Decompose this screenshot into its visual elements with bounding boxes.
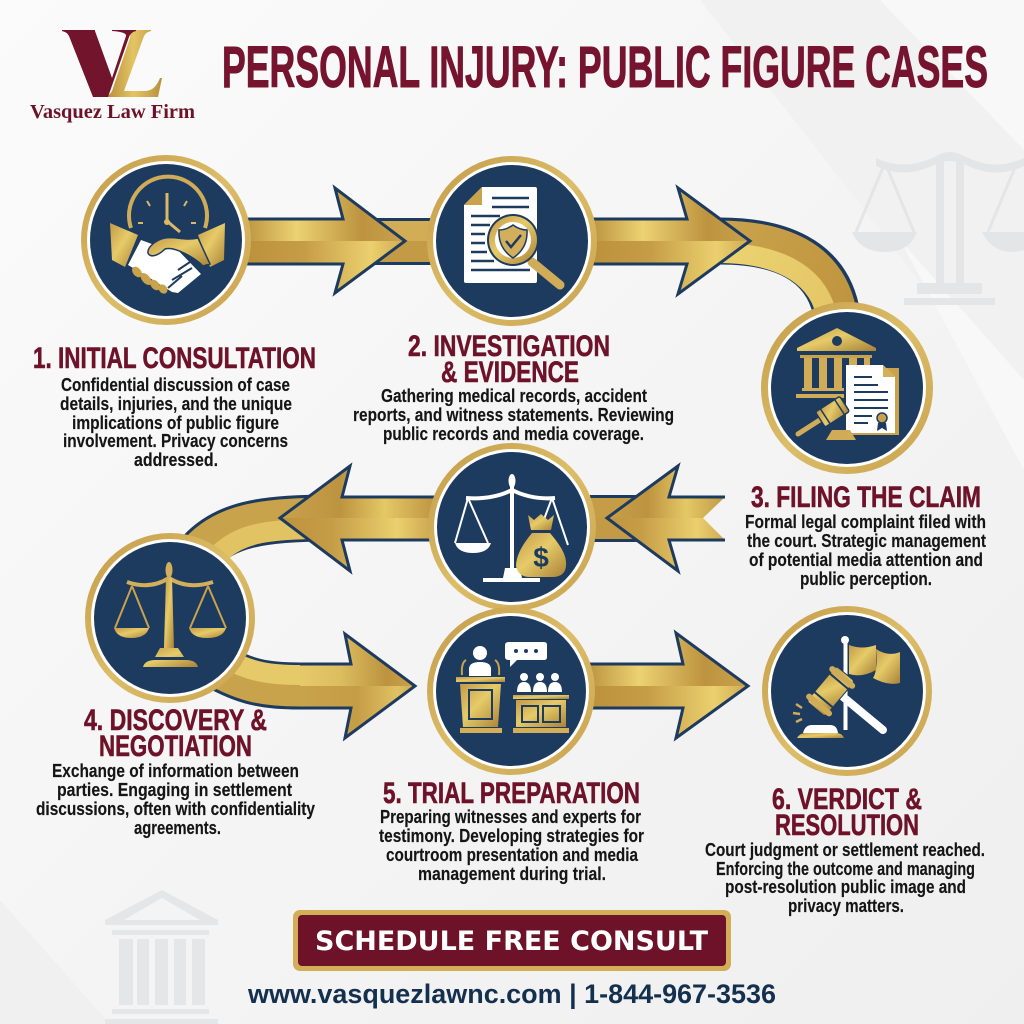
step 4 text	[36, 704, 315, 838]
step 6 description	[705, 840, 985, 916]
watermark: scales of justice	[852, 152, 1024, 305]
step 5 description: Preparing witnesses and experts for	[380, 807, 641, 827]
step 5 description: courtroom presentation and media	[386, 845, 639, 865]
circle icon: step 2 document and magnifier	[427, 156, 597, 326]
step 1 description: details, injuries, and the unique	[60, 394, 292, 414]
arrow: step 2 to step 3	[590, 188, 750, 294]
step 3 description: Formal legal complaint filed with	[745, 512, 986, 532]
step 4 description	[36, 761, 315, 838]
step 6 heading	[772, 783, 922, 842]
arrow: step 4 to step 5	[300, 634, 415, 738]
step 4 heading: 4. DISCOVERY &	[84, 704, 267, 737]
arrow: curve out of step 4	[215, 658, 352, 686]
step 6 description: privacy matters.	[788, 896, 904, 916]
step 2 heading: & EVIDENCE	[441, 356, 579, 389]
step 1 description: Confidential discussion of case	[61, 375, 290, 395]
step 2 heading: 2. INVESTIGATION	[408, 330, 610, 363]
step 2 description: Gathering medical records, accident	[381, 386, 647, 406]
step 5 heading: 5. TRIAL PREPARATION	[383, 777, 640, 810]
step 3 description: of potential media attention and	[749, 550, 983, 570]
step 5 description: testimony. Developing strategies for	[379, 826, 644, 846]
button: schedule free consult: SCHEDULE FREE CONSULT	[315, 926, 709, 957]
circle icon: step 1 handshake and clock	[81, 155, 251, 325]
contact line: www.vasquezlawnc.com | 1-844-967-3536	[247, 979, 776, 1009]
step 1 description: implications of public figure	[72, 413, 279, 433]
step 4 description: agreements.	[134, 818, 221, 838]
step 6 description: post-resolution public image and	[725, 877, 966, 897]
circle icon: middle scales and money bag: $	[533, 542, 549, 573]
arrow: middle circle to step 4	[280, 466, 435, 571]
button: schedule free consult	[293, 910, 731, 971]
step 3 description	[745, 512, 986, 589]
step 5 text	[379, 777, 644, 884]
step 6 heading: 6. VERDICT &	[772, 783, 922, 816]
step 5 description: management during trial.	[418, 864, 606, 884]
logo wordmark: Vasquez Law Firm	[30, 101, 195, 123]
step 1 text	[33, 342, 316, 470]
arrow: step 2 to step 3 curve	[718, 241, 836, 312]
step 1 description: addressed.	[134, 450, 218, 470]
step 2 heading	[408, 330, 610, 389]
step 2 description	[353, 386, 674, 444]
circle icon: step 3 courthouse and filing	[761, 302, 933, 474]
logo monogram V	[62, 30, 136, 97]
circle icon: middle scales and money bag	[428, 443, 596, 611]
logo monogram L	[105, 30, 162, 97]
step 4 description: Exchange of information between	[52, 761, 299, 781]
logo: Vasquez Law Firm	[30, 30, 195, 123]
arrow: step 5 to step 6	[585, 633, 748, 738]
step 4 description: discussions, often with confidentiality	[36, 799, 315, 819]
arrow: step 3 into middle circle	[590, 466, 725, 571]
arrow: step 1 to step 2	[245, 188, 435, 293]
step 3 description: public perception.	[800, 569, 932, 589]
circle icon: step 4 scales	[85, 533, 255, 703]
step 4 heading	[84, 704, 267, 763]
step 4 heading: NEGOTIATION	[99, 730, 252, 763]
step 3 description: the court. Strategic management	[747, 531, 986, 551]
step 1 heading: 1. INITIAL CONSULTATION	[33, 342, 316, 375]
circle icon: step 5 courtroom	[427, 607, 595, 775]
step 6 text	[705, 783, 985, 916]
watermark: courthouse	[105, 890, 218, 1024]
circle icon: step 6 gavel and flag	[762, 606, 932, 776]
arrow: curve into step 4	[200, 518, 332, 558]
step 2 text	[353, 330, 674, 444]
step 5 description	[379, 807, 644, 884]
step 2 description: reports, and witness statements. Reviewing	[353, 405, 674, 425]
step 1 description	[60, 375, 292, 470]
step 4 description: parties. Engaging in settlement	[57, 780, 292, 800]
step 2 description: public records and media coverage.	[383, 424, 644, 444]
step 6 heading: RESOLUTION	[775, 809, 919, 842]
step 1 description: involvement. Privacy concerns	[63, 431, 288, 451]
step 3 text	[745, 481, 986, 589]
